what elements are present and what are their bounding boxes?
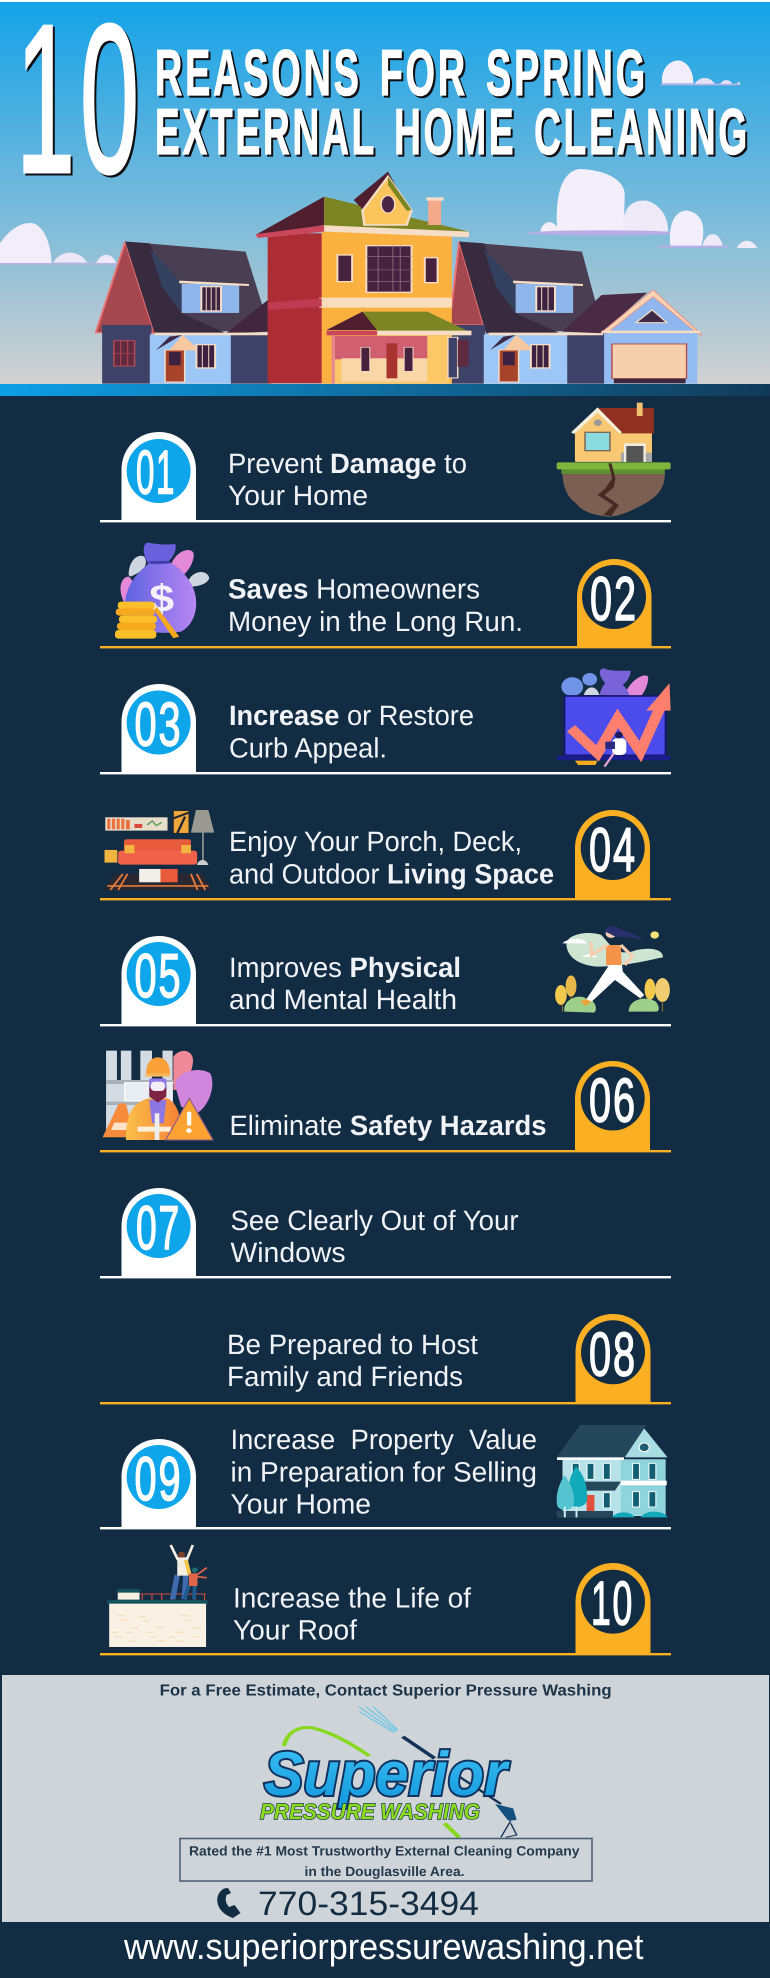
icon: phone [217, 1888, 240, 1918]
reason text 04: Enjoy Your Porch, Deck, [229, 826, 522, 857]
number 06: 06 [589, 1066, 637, 1136]
number circle 04 [581, 816, 645, 880]
number 01: 01 [136, 438, 176, 508]
icon: woman running outdoors [555, 926, 670, 1013]
clouds [0, 61, 757, 265]
reason text 01: Your Home [228, 480, 368, 511]
reason text 01: Prevent Damage to [228, 448, 467, 479]
phone number: 770-315-3494 [258, 1885, 479, 1923]
divider line [100, 1150, 671, 1152]
title [16, 0, 750, 217]
header panel [0, 0, 770, 384]
icon: money bag and coins [115, 543, 209, 639]
panel background [2, 1675, 769, 1922]
reason text 10: Increase the Life of [233, 1583, 471, 1614]
number circle 02 [582, 565, 646, 629]
number circle 10 [581, 1570, 645, 1634]
number 07: 07 [136, 1194, 181, 1263]
number 04: 04 [589, 816, 637, 885]
icon: family celebrating on roof [107, 1545, 208, 1647]
divider line [100, 772, 671, 774]
reason 05 [100, 926, 671, 1026]
reason text 09 [230, 1424, 537, 1519]
icon: construction worker with warning sign [103, 1051, 213, 1140]
divider line [100, 1024, 671, 1026]
number circle 05 [127, 942, 191, 1006]
logo tagline: PRESSURE WASHING [260, 1799, 480, 1824]
reason 08 [100, 1314, 671, 1404]
contact panel [2, 1675, 769, 1923]
reason text 05: and Mental Health [229, 984, 457, 1015]
reason text 03: Curb Appeal. [229, 732, 387, 764]
number circle 08 [581, 1320, 645, 1384]
contact heading: For a Free Estimate, Contact Superior Pressure Washing [160, 1683, 612, 1700]
number tab 01 [122, 432, 196, 521]
reason text 08: Family and Friends [227, 1361, 463, 1392]
logo wordmark: Superior [264, 1740, 510, 1809]
number tab 04 [575, 810, 650, 899]
reason text 09: Increase Property Value [230, 1424, 537, 1455]
reason text 07: Windows [230, 1237, 346, 1268]
rating box: Rated the #1 Most Trustworthy External Cleaning Company [189, 1844, 580, 1859]
number 09: 09 [134, 1445, 182, 1514]
reason 06 [100, 1051, 671, 1152]
reason text 04: and Outdoor Living Space [229, 858, 554, 890]
reason text 10: Your Roof [233, 1615, 357, 1646]
reason text 07 [230, 1205, 518, 1268]
reason text 08: Be Prepared to Host [227, 1329, 478, 1360]
reason 01 [100, 403, 671, 522]
divider line [100, 1653, 671, 1655]
icon: house on cracked ground [557, 403, 671, 517]
divider line [100, 1527, 671, 1529]
number 03: 03 [134, 690, 182, 760]
logo spray and wand [284, 1707, 517, 1837]
reason 09 [100, 1424, 671, 1529]
reason text 04 [229, 826, 554, 890]
reason text 08 [227, 1329, 478, 1392]
sky background [0, 2, 770, 384]
reason 10 [100, 1545, 671, 1655]
number tab 10 [576, 1563, 650, 1654]
reason text 07: See Clearly Out of Your [230, 1205, 518, 1236]
icon: laptop with rising arrow [557, 668, 671, 767]
centre house [255, 172, 471, 384]
reason text 09: in Preparation for Selling [230, 1456, 537, 1487]
number 10: 10 [591, 1570, 634, 1639]
$ sign: $ [149, 577, 174, 620]
number tab 07 [122, 1188, 196, 1277]
reason 07 [100, 1188, 671, 1278]
number tab 08 [576, 1314, 650, 1403]
number tab 03 [122, 684, 196, 773]
number tab 02 [577, 559, 652, 647]
reason text 02: Money in the Long Run. [228, 606, 523, 637]
website url: www.superiorpressurewashing.net [123, 1926, 643, 1967]
rating box [180, 1838, 592, 1881]
icon: two-storey teal house [557, 1425, 668, 1518]
number tab 05 [122, 936, 196, 1025]
number circle 03 [127, 690, 191, 754]
rating box: in the Douglasville Area. [304, 1864, 464, 1879]
reason text 03 [229, 700, 474, 764]
left house [96, 242, 271, 384]
reason 04 [100, 810, 671, 900]
divider line [100, 646, 671, 648]
icon: living room furniture [103, 810, 214, 890]
reason text 06: Eliminate Safety Hazards [230, 1110, 546, 1141]
number 05: 05 [134, 942, 182, 1011]
number circle 06 [581, 1066, 645, 1130]
reason text 09: Your Home [230, 1488, 371, 1519]
divider line [100, 1402, 671, 1404]
number circle 09 [127, 1445, 191, 1509]
number tab 06 [575, 1061, 650, 1151]
reason 02 [100, 543, 671, 648]
reason text 05: Improves Physical [229, 952, 461, 983]
reason text 01 [228, 448, 467, 511]
reason text 02 [228, 574, 523, 637]
number circle 07 [127, 1194, 191, 1258]
reason text 02: Saves Homeowners [228, 574, 480, 604]
reason 03 [100, 668, 671, 774]
number circle 01 [127, 439, 191, 503]
number 02: 02 [590, 565, 638, 634]
number 08: 08 [589, 1320, 637, 1389]
header base bar [0, 384, 770, 396]
number tab 09 [122, 1439, 196, 1528]
reason text 03: Increase or Restore [229, 700, 474, 731]
logo: Superior Pressure Washing [260, 1707, 517, 1837]
reason text 10 [233, 1583, 471, 1646]
right house with garage [449, 242, 702, 384]
reason text 05 [229, 952, 461, 1015]
divider line [100, 1276, 671, 1278]
divider line [100, 898, 671, 900]
top white edge [0, 0, 770, 2]
divider line [100, 520, 671, 522]
